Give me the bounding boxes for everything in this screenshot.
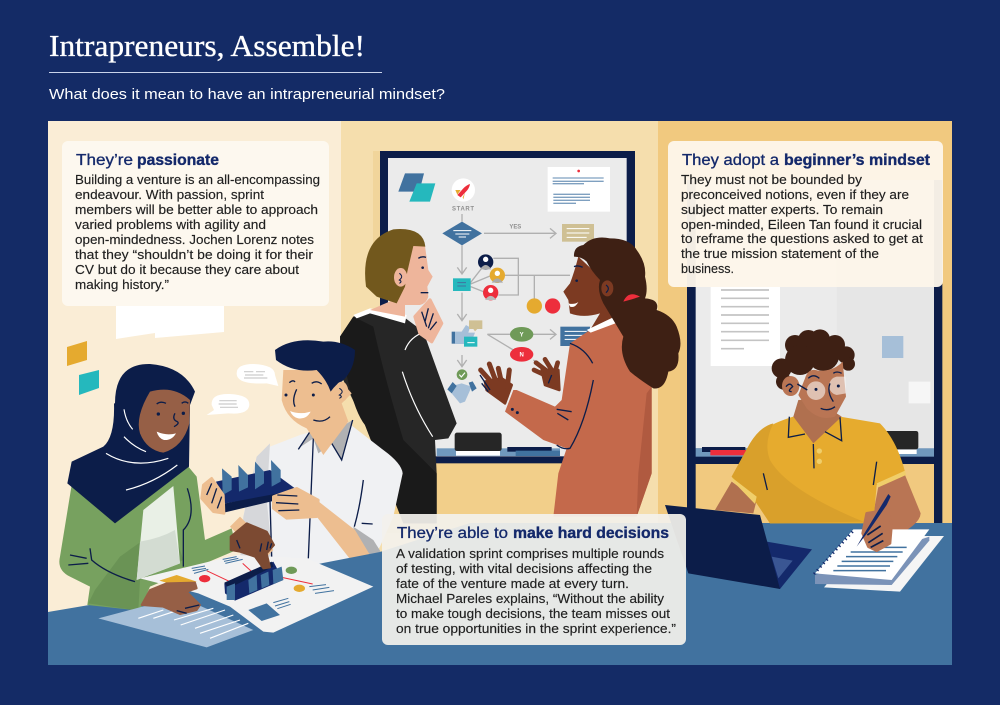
person: woman in orange jacket — [480, 237, 680, 517]
body text: to reframe the questions asked to get at — [681, 232, 924, 246]
title: Intrapreneurs, Assemble! — [49, 28, 365, 63]
body text: Michael Pareles explains, “Without the ability — [396, 592, 665, 606]
heading: beginner’s mindset — [784, 152, 930, 169]
body text — [396, 547, 676, 636]
documents on table — [98, 555, 373, 647]
body text: endeavour. With passion, sprint — [75, 188, 265, 202]
heading: make hard decisions — [513, 525, 669, 542]
body text: the true mission statement of the — [681, 247, 879, 261]
body text: A validation sprint comprises multiple rounds — [396, 547, 664, 561]
body text: CV but do it because they care about — [75, 263, 300, 277]
body text: subject matter experts. To remain — [681, 203, 883, 217]
body text: members will be better able to approach — [75, 203, 318, 217]
panel: passionate — [62, 141, 329, 306]
person: woman in hijab — [59, 364, 237, 611]
heading — [682, 152, 930, 169]
notebook and pen — [814, 494, 944, 592]
heading: passionate — [137, 152, 219, 169]
panel: beginner's mindset — [668, 141, 943, 287]
hands — [142, 478, 318, 614]
heading — [76, 152, 219, 169]
body text — [75, 173, 320, 292]
body text: varied problems with agility and — [75, 218, 266, 232]
whiteboard: flowchart: YES — [509, 224, 521, 230]
heading: They adopt a — [682, 152, 779, 169]
body text: Building a venture is an all-encompassing — [75, 173, 320, 187]
person: man in white shirt — [207, 340, 403, 576]
body text: to make tough decisions, the team misses out — [396, 607, 671, 621]
heading: They’re able to — [397, 525, 508, 542]
body text: that they “shouldn’t be doing it for their — [75, 248, 313, 262]
speech bubbles — [207, 364, 278, 415]
body text — [681, 173, 924, 276]
whiteboard: flowchart — [380, 151, 635, 463]
body text: fate of the venture made at every turn. — [396, 577, 629, 591]
whiteboard: flowchart: N — [520, 353, 524, 359]
whiteboard: right — [687, 180, 942, 523]
body text: open-mindedness. Jochen Lorenz notes — [75, 233, 314, 247]
body text: They must not be bounded by — [681, 173, 863, 187]
subtitle: What does it mean to have an intrapreneurial mindset? — [49, 86, 445, 103]
body text: preconceived notions, even if they are — [681, 188, 909, 202]
body text: of testing, with vital decisions affecting the — [396, 562, 652, 576]
person: man in black suit — [340, 229, 457, 523]
whiteboard: flowchart: START — [452, 207, 474, 213]
laptop — [665, 505, 812, 589]
table — [48, 523, 952, 665]
body text: making history.” — [75, 278, 169, 292]
person: man in yellow polo — [715, 329, 921, 538]
heading — [397, 525, 669, 542]
whiteboard: flowchart: Y — [520, 333, 524, 339]
body text: business. — [681, 262, 734, 276]
body text: on true opportunities in the sprint experience.” — [396, 622, 676, 636]
hands — [481, 359, 559, 403]
heading: They’re — [76, 152, 133, 169]
paper model prototypes — [216, 460, 295, 601]
body text: open-minded, Eileen Tan found it crucial — [681, 218, 922, 232]
panel: hard decisions — [382, 514, 686, 645]
sticky notes and paper — [67, 306, 224, 395]
panel: office scene — [48, 121, 952, 665]
